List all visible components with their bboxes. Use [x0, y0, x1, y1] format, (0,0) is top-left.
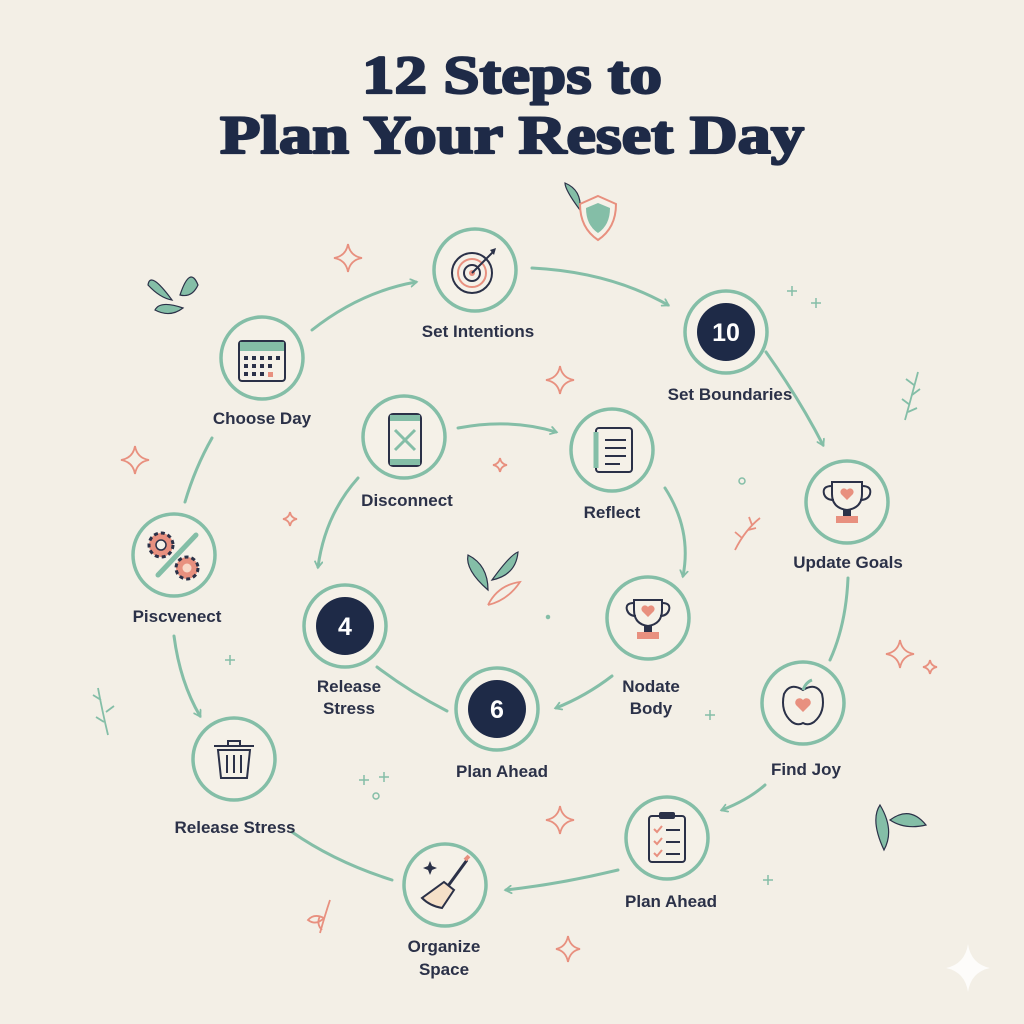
step: organize space: Space [419, 960, 469, 979]
decorative sparkles [121, 244, 937, 962]
step: plan ahead clipboard: Plan Ahead [625, 892, 717, 911]
decorative leaves [148, 183, 926, 850]
step: set intentions: Set Intentions [422, 322, 534, 341]
step: organize space [404, 844, 486, 979]
title [220, 45, 804, 165]
step 4: 4 [338, 613, 352, 641]
step: trash [175, 718, 295, 837]
step: set intentions [422, 229, 534, 341]
step: nodate body: Body [630, 699, 673, 718]
step: nodate body: Nodate [622, 677, 680, 696]
title: Plan Your Reset Day [220, 105, 804, 165]
step 6: 6 [490, 696, 504, 724]
arrows [174, 268, 848, 890]
step: choose day: Choose Day [213, 409, 312, 428]
step: gears: Piscvenect [133, 607, 222, 626]
step: organize space: Organize [408, 937, 480, 956]
title: 12 Steps to [362, 45, 662, 105]
step: disconnect: Disconnect [361, 491, 453, 510]
decorative shield [580, 196, 616, 240]
decorative dots [225, 286, 821, 885]
step: trash: Release Stress [175, 818, 295, 837]
step: update goals: Update Goals [793, 553, 903, 572]
step 4: Stress [323, 699, 375, 718]
step: update goals [793, 461, 903, 572]
step 4: Release [317, 677, 381, 696]
step: find joy: Find Joy [771, 760, 841, 779]
step: disconnect [361, 396, 453, 510]
step: reflect: Reflect [584, 503, 641, 522]
corner sparkle [946, 944, 990, 992]
step: nodate body [607, 577, 689, 718]
step 4 [304, 585, 386, 718]
step 6: Plan Ahead [456, 762, 548, 781]
step 6 [456, 668, 548, 781]
decorative sprigs [93, 372, 920, 933]
step: choose day [213, 317, 312, 428]
step: find joy [762, 662, 844, 779]
step 10: set boundaries: 10 [712, 319, 740, 347]
step: reflect [571, 409, 653, 522]
step: plan ahead clipboard [625, 797, 717, 911]
step: gears [133, 514, 222, 626]
step 10: set boundaries: Set Boundaries [668, 385, 792, 404]
step 10: set boundaries [668, 291, 792, 404]
